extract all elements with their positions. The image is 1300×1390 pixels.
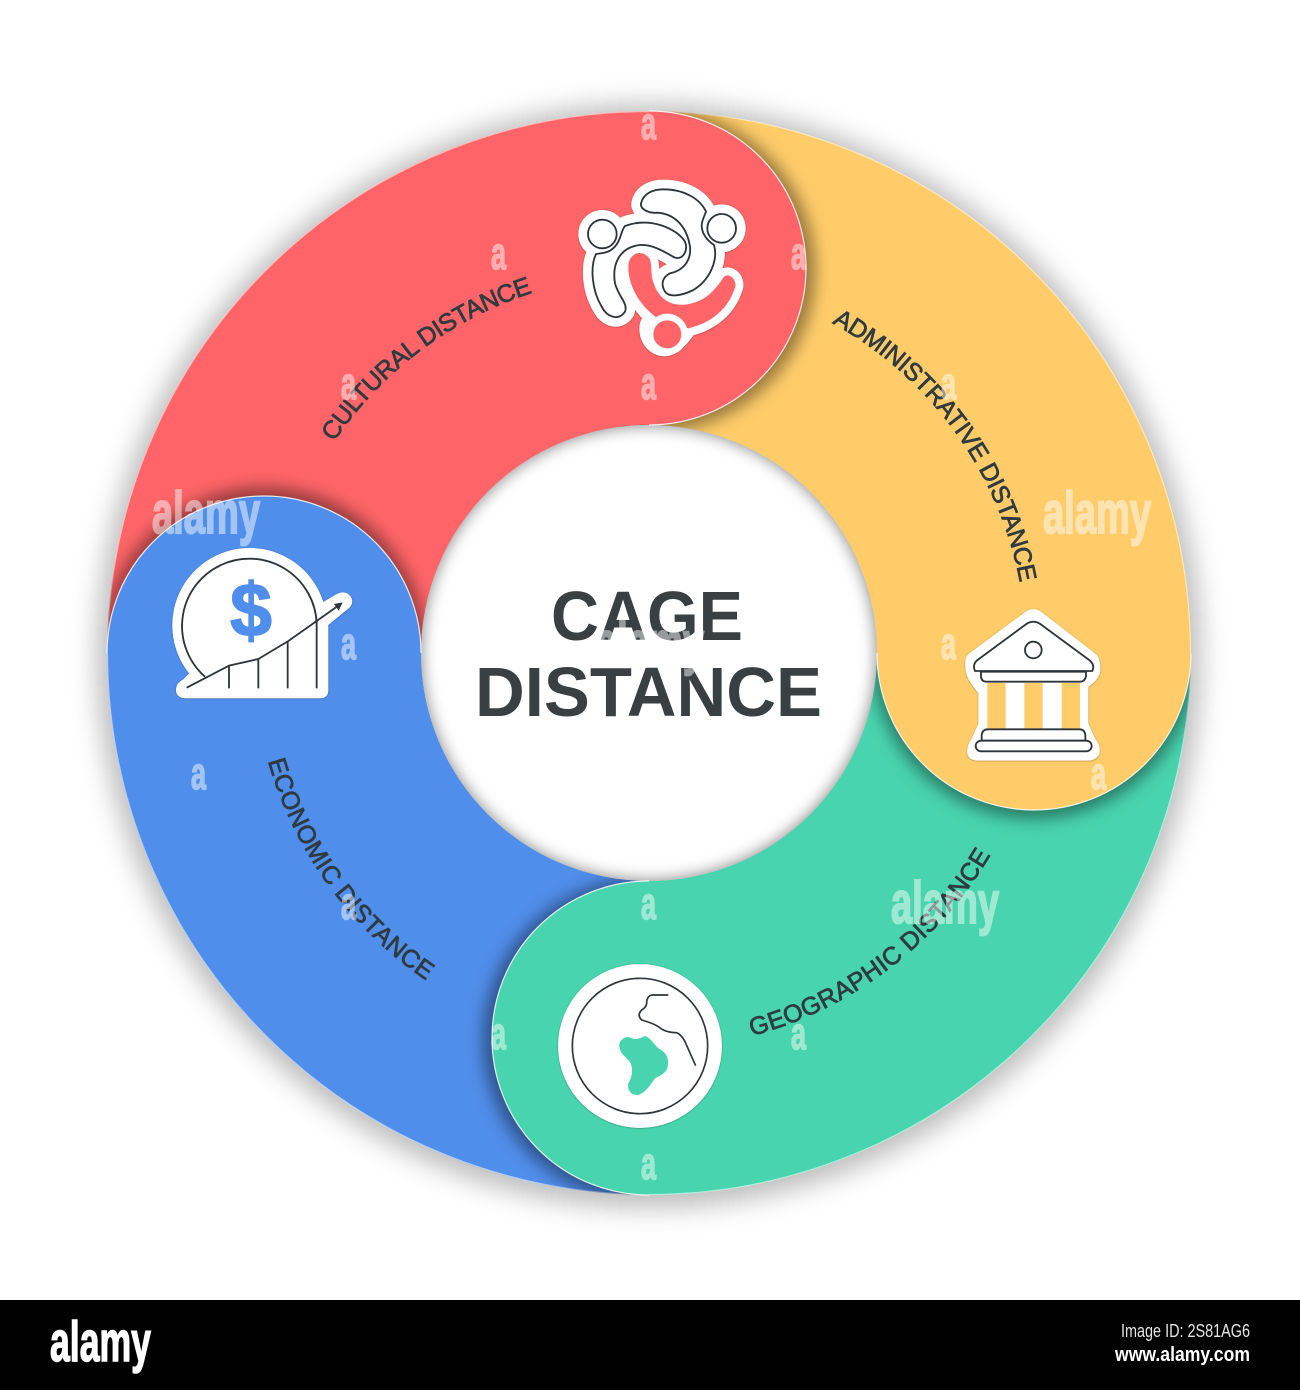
watermark: alamy repeated: a [641, 98, 657, 149]
watermark: alamy repeated: a [791, 1008, 807, 1059]
footer url: www.alamy.com [1114, 1344, 1250, 1366]
red rounded cap [649, 111, 806, 425]
outer rim highlight [108, 112, 1190, 1194]
label: geographic distance: GEOGRAPHIC DISTANCE [750, 846, 990, 1034]
watermark: alamy repeated: a [341, 618, 357, 669]
watermark: alamy repeated: alamy [596, 610, 704, 676]
title: CAGE DISTANCE: DISTANCE [475, 653, 822, 731]
watermark: alamy repeated: alamy [152, 480, 260, 546]
watermark: alamy repeated: a [791, 228, 807, 279]
watermark: alamy repeated: a [341, 358, 357, 409]
panel: cultural distance band [107, 111, 649, 653]
icon: globe [558, 964, 722, 1128]
title: CAGE DISTANCE: CAGE [551, 577, 743, 655]
footer logo: alamy [50, 1310, 151, 1374]
watermark: alamy repeated: a [641, 1138, 657, 1189]
green cap shadow on blue [472, 875, 639, 1195]
watermark: alamy repeated: a [341, 878, 357, 929]
watermark: alamy repeated: a [941, 618, 957, 669]
watermark: alamy repeated: a [491, 228, 507, 279]
icon: bank building [965, 609, 1100, 761]
panel: administrative distance band [649, 111, 1191, 653]
watermark: alamy repeated: a [641, 358, 657, 409]
footer image id: Image ID: 2S81AG6 [1121, 1321, 1250, 1341]
panel: geographic distance band [649, 653, 1191, 1195]
panel: centre circle [411, 415, 887, 891]
footer bar [0, 1300, 1300, 1390]
watermark: alamy repeated: a [491, 1008, 507, 1059]
red cap shadow on yellow [656, 111, 826, 433]
icon: dollar with growth chart [172, 548, 352, 698]
label: cultural distance: CULTURAL DISTANCE [323, 276, 532, 438]
watermark: alamy repeated: a [191, 748, 207, 799]
title: CAGE DISTANCE [475, 577, 822, 731]
blue rounded cap [107, 496, 421, 653]
green rounded cap [492, 881, 649, 1195]
yellow cap rim [877, 653, 1191, 810]
label: economic distance: ECONOMIC DISTANCE [268, 758, 436, 980]
yellow cap shadow on green [870, 661, 1191, 829]
icon: dollar with growth chart: $ [230, 568, 272, 652]
red cap rim [649, 111, 806, 425]
watermark: alamy repeated: alamy [1043, 480, 1151, 546]
yellow rounded cap [877, 653, 1191, 810]
label: administrative distance: ADMINISTRATIVE DISTANCE [832, 311, 1037, 582]
icon: people circle [588, 189, 736, 355]
watermark: alamy repeated: a [1091, 748, 1107, 799]
blue cap shadow on red [107, 476, 428, 644]
outer soft shadow [97, 104, 1201, 1208]
watermark: alamy repeated [152, 98, 1151, 1189]
watermark: alamy repeated: alamy [891, 870, 999, 936]
watermark: alamy repeated: a [641, 878, 657, 929]
panel: economic distance band [107, 653, 649, 1195]
watermark: alamy repeated: a [941, 358, 957, 409]
blue cap rim [107, 496, 421, 653]
green cap rim [492, 881, 649, 1195]
